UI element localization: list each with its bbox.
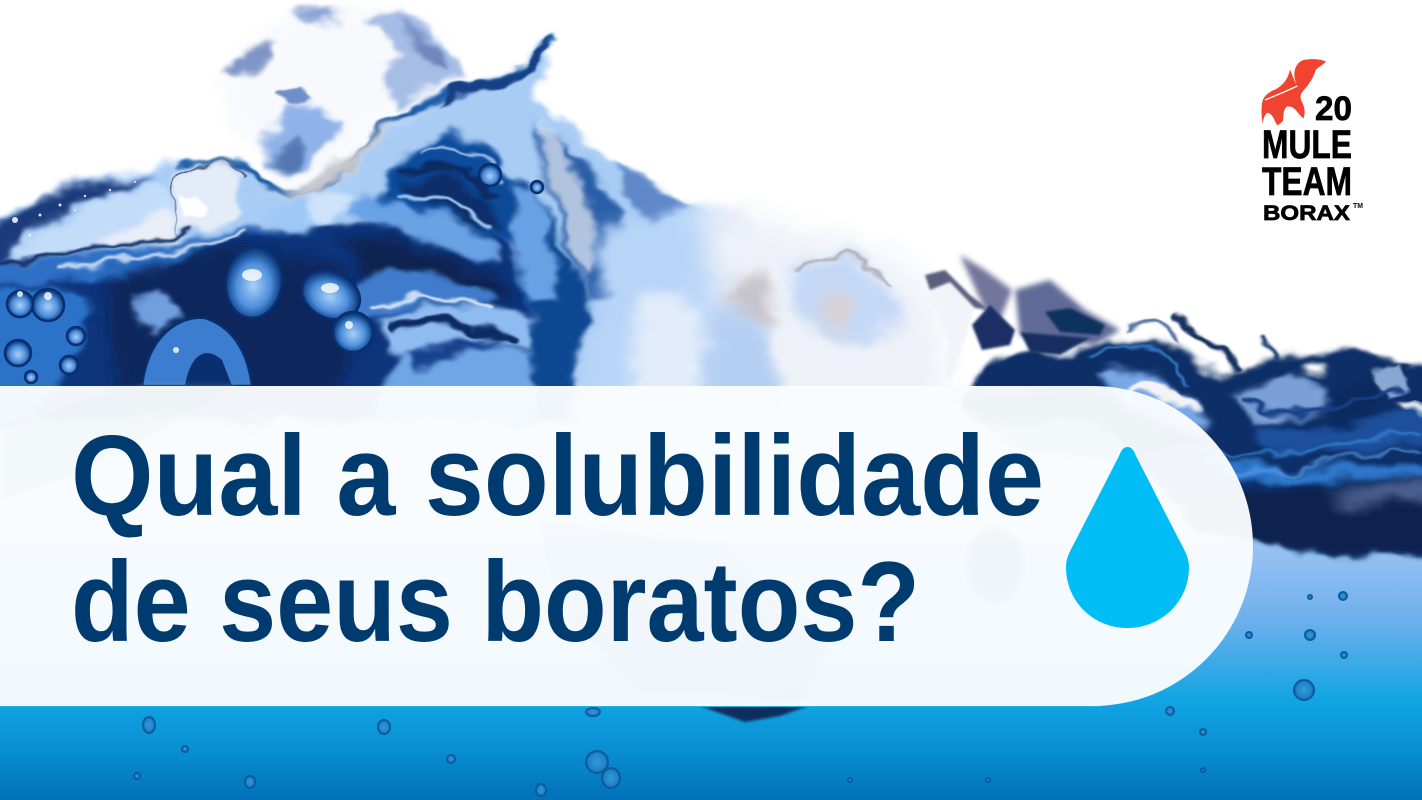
logo: 20 Mule Team Borax: TEAM: [1262, 160, 1352, 204]
pale right slope: [700, 205, 950, 420]
streak details: [0, 144, 618, 370]
right crest shards: [925, 255, 1120, 380]
right dark water: [960, 342, 1422, 558]
blob inner blue pocket: [262, 105, 345, 175]
bubbles in lower water: [134, 592, 1347, 796]
title: [71, 413, 1044, 666]
light waves mid: [340, 195, 505, 262]
upper pale blob: [222, 8, 470, 190]
logo: 20 Mule Team Borax: BORAX: [1263, 202, 1350, 225]
blue ribbon: [182, 35, 553, 193]
icon: red mule: [1261, 59, 1326, 125]
splash base left: [0, 35, 711, 400]
logo: 20 Mule Team Borax: 20: [1315, 90, 1352, 128]
main dark water body: [0, 215, 540, 420]
blob blue-grey top patches: [290, 9, 345, 26]
light column and hair streaks: [505, 180, 590, 420]
logo: 20 Mule Team Borax: [1261, 59, 1363, 225]
light lower patches: [376, 305, 540, 360]
bubbles in splash: [5, 164, 543, 386]
dark upper arch: [370, 130, 535, 260]
bubble dome: [172, 160, 240, 232]
right light patches: [1235, 375, 1330, 420]
title: Qual a solubilidade: [71, 413, 1044, 540]
left dark speckle band: [0, 176, 158, 270]
ghost water inside panel: [0, 386, 1200, 700]
logo: 20 Mule Team Borax: MULE: [1262, 123, 1352, 167]
background: sea gradient: [0, 540, 1422, 800]
icon: water drop: [1066, 447, 1189, 628]
title: de seus boratos?: [71, 539, 920, 666]
panel: title banner: [0, 386, 1253, 707]
background photo: water splash: [0, 8, 1422, 558]
dark splash tip under panel: [700, 706, 808, 722]
bubble highlights: [17, 269, 353, 353]
specks on left band: [12, 181, 136, 236]
logo: 20 Mule Team Borax: TM: [1353, 203, 1363, 210]
left light wedge: [10, 183, 174, 262]
